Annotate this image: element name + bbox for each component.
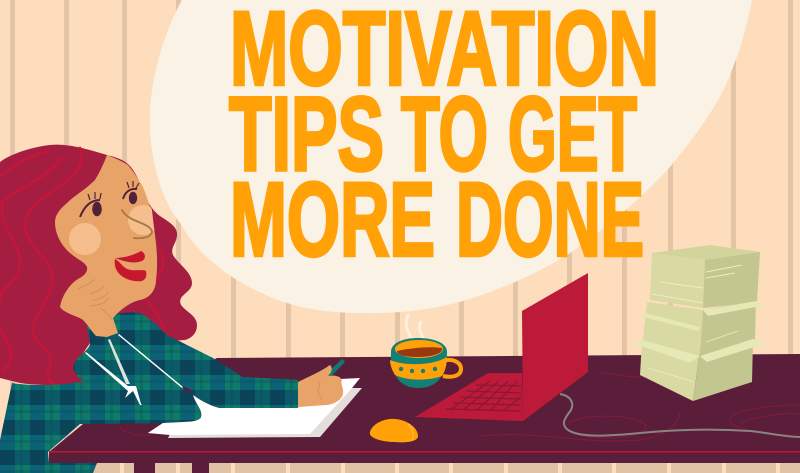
- desk top: [49, 354, 800, 463]
- laptop screen: [522, 273, 588, 421]
- keyboard: [446, 381, 521, 411]
- desk: [49, 354, 800, 473]
- title line 3: DONE: [456, 162, 644, 278]
- steam: [406, 315, 424, 352]
- hair: [0, 145, 197, 385]
- desk edge line: [49, 451, 800, 453]
- mouse cable: [560, 394, 800, 437]
- mouth: [115, 251, 146, 281]
- finger lines: [78, 279, 112, 320]
- cheeks: [69, 205, 158, 255]
- title line 2: [229, 76, 637, 193]
- hoodie strings: [85, 334, 193, 405]
- title line 2: TIPS: [229, 76, 384, 193]
- title line 2: GET: [508, 76, 637, 193]
- face and neck: [55, 155, 157, 337]
- paper sheet: [148, 378, 362, 438]
- hand: [298, 365, 343, 407]
- mouse: [370, 419, 418, 442]
- speech bubble: [150, 0, 752, 313]
- paper edge lines: [648, 265, 742, 382]
- pencil: [308, 359, 345, 394]
- desk legs: [134, 460, 209, 473]
- middle block: [643, 300, 756, 353]
- hand with pencil: [298, 359, 345, 407]
- title: [229, 0, 659, 278]
- cup handle: [443, 360, 461, 377]
- laptop: [415, 273, 588, 421]
- shirt: [0, 312, 298, 473]
- paper flaps: [633, 301, 767, 363]
- cup body: [391, 338, 447, 388]
- laptop base: [415, 373, 523, 421]
- eyes: [80, 181, 139, 217]
- nose: [122, 210, 152, 238]
- hair strands: [0, 148, 163, 385]
- person: [0, 145, 298, 473]
- title line 2: TO: [401, 76, 488, 193]
- top block: [650, 245, 760, 308]
- paper stack: [633, 245, 767, 401]
- title line 3: MORE: [230, 162, 435, 278]
- sleeve over paper: [193, 377, 298, 408]
- bottom block: [640, 340, 753, 401]
- wood grain: [120, 372, 800, 441]
- floor strip: [0, 462, 800, 473]
- coffee cup: [390, 315, 461, 388]
